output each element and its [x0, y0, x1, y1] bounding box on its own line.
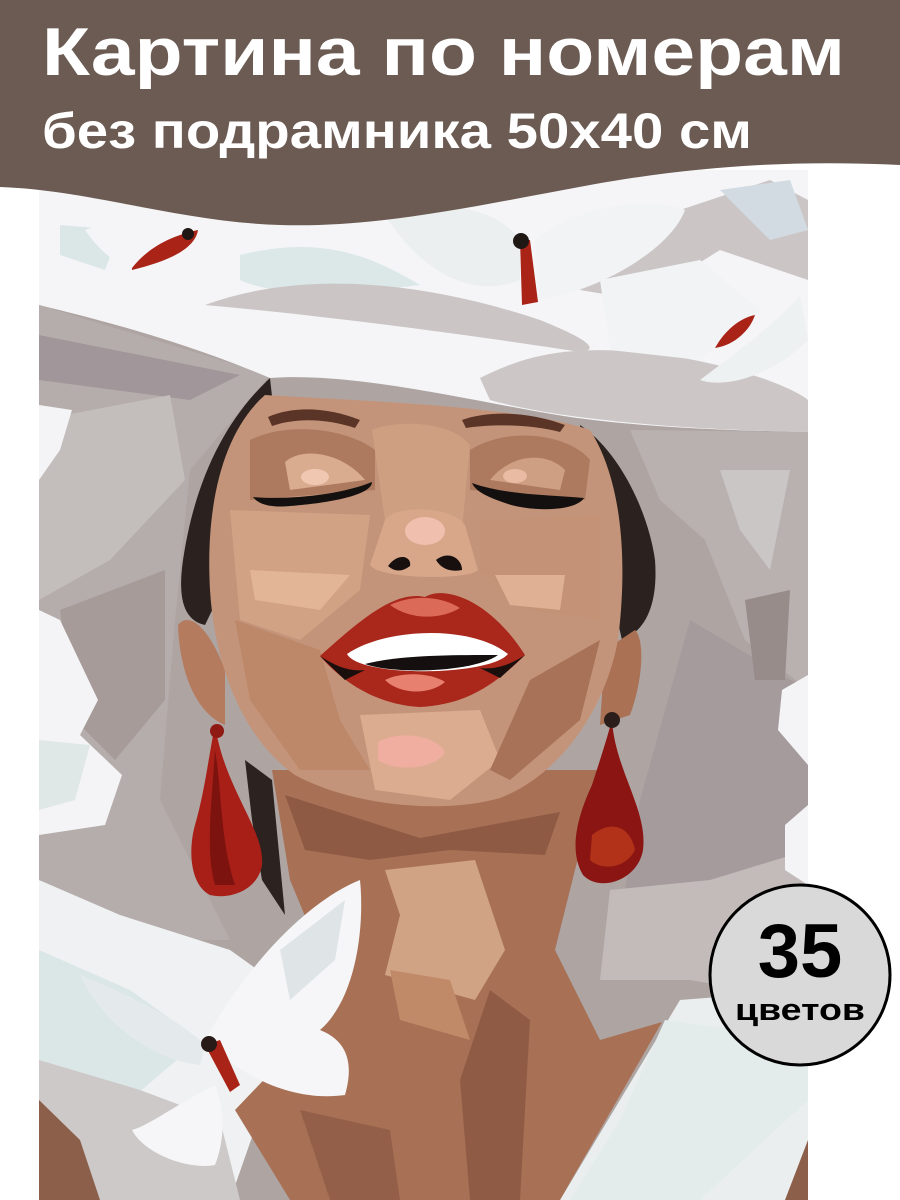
lips and teeth — [320, 593, 525, 707]
left earring — [191, 724, 262, 896]
badge number: 35 — [758, 909, 842, 994]
large white butterfly on neck — [80, 880, 361, 1166]
face — [209, 395, 622, 806]
right earring — [576, 712, 644, 883]
badge: 35 colours — [710, 885, 890, 1065]
grey background — [39, 305, 808, 1200]
butterflies on hat — [85, 222, 755, 348]
title line 1: Картина по номерам — [42, 14, 845, 90]
badge label: цветов — [735, 992, 865, 1027]
neck — [235, 770, 662, 1200]
ears — [178, 620, 641, 725]
white butterflies on the left edge and right edge — [39, 405, 808, 885]
eyelids, eyes and brows — [253, 409, 584, 509]
hair — [181, 378, 656, 915]
header banner — [0, 0, 900, 225]
nose — [370, 509, 478, 577]
title line 2: без подрамника 50х40 см — [42, 103, 752, 159]
hat — [39, 170, 808, 432]
painting: woman in white hat — [39, 170, 808, 1200]
lower right white fabric — [560, 990, 808, 1200]
lower left white fabric — [39, 880, 262, 1200]
